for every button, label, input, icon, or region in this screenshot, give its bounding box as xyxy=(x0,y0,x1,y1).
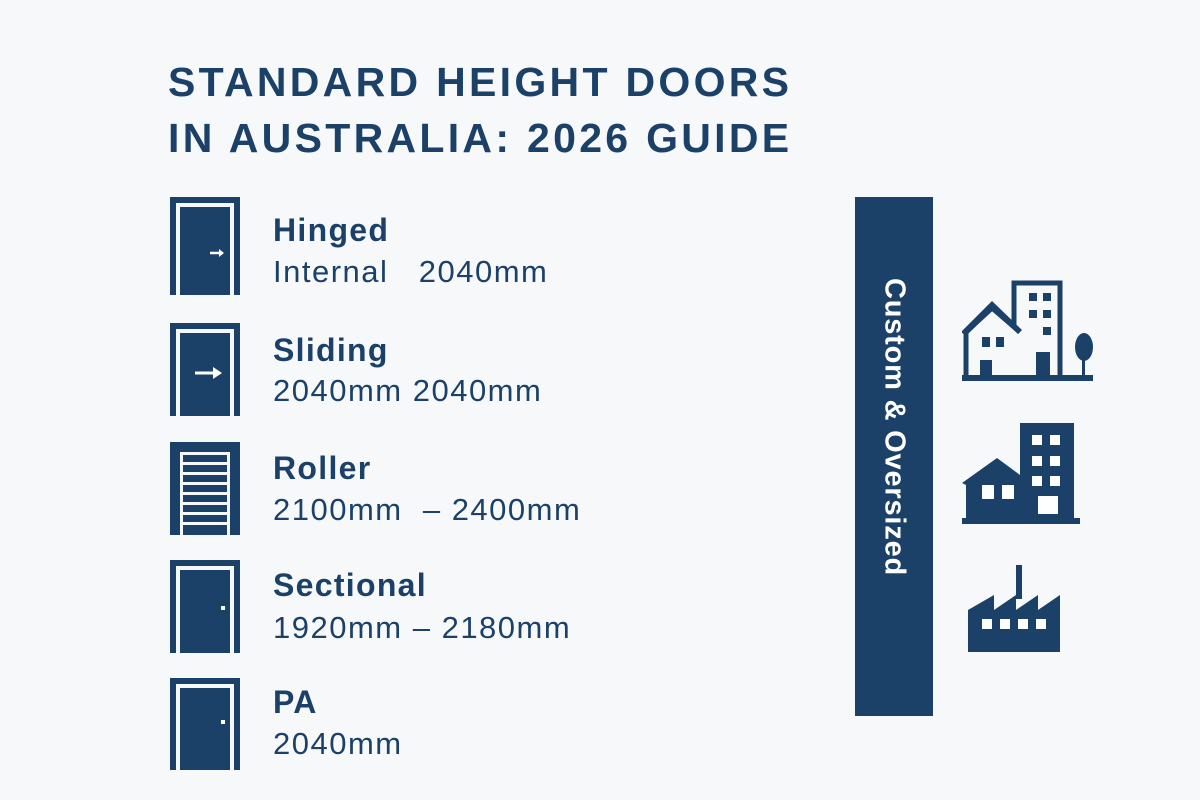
icon: factory xyxy=(968,565,1060,652)
title: IN AUSTRALIA: 2026 GUIDE xyxy=(168,115,792,161)
icon: commercial building xyxy=(962,423,1080,524)
title xyxy=(168,59,792,161)
value: hinged: Internal 2040mm xyxy=(273,254,548,289)
label: hinged: Hinged xyxy=(273,212,389,248)
title: STANDARD HEIGHT DOORS xyxy=(168,59,792,105)
vertical banner: custom & oversized: Custom & Oversized xyxy=(878,278,910,576)
label: sectional: Sectional xyxy=(273,567,427,603)
icon: house and apartment xyxy=(962,280,1093,381)
label: roller: Roller xyxy=(273,450,372,486)
value: PA: 2040mm xyxy=(273,726,403,761)
icon: roller door xyxy=(170,442,240,535)
icon: hinged door xyxy=(170,197,240,295)
value: sectional: 1920mm – 2180mm xyxy=(273,610,571,645)
icon: PA door xyxy=(170,678,240,770)
value: sliding: 2040mm 2040mm xyxy=(273,373,542,408)
vertical banner: custom & oversized xyxy=(855,197,933,716)
value: roller: 2100mm – 2400mm xyxy=(273,492,581,527)
icon: sliding door xyxy=(170,323,240,416)
label: sliding: Sliding xyxy=(273,332,389,368)
label: PA: PA xyxy=(273,684,318,720)
icon: sectional door xyxy=(170,560,240,653)
